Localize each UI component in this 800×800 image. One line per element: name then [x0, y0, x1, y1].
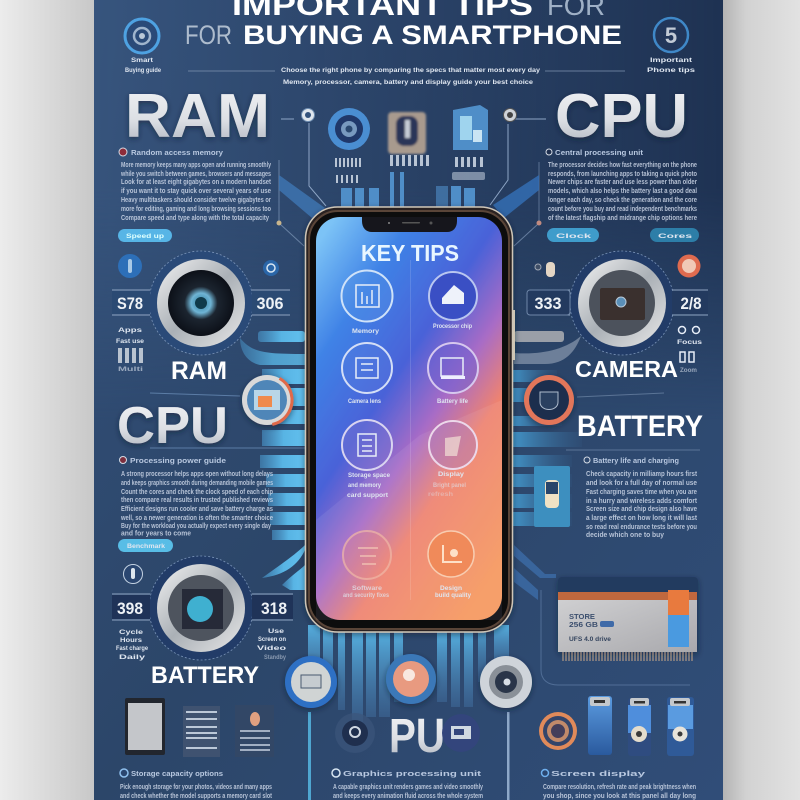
- right camera module: 333: [534, 294, 562, 313]
- mini stats battery left: Cycle: [119, 630, 144, 636]
- text block: RAM: More memory keeps many apps open and running smoothly: [121, 162, 271, 169]
- text block: CPU left: Buy for the workload you actually expect every single day: [121, 523, 271, 530]
- text block: RAM: [119, 148, 272, 222]
- battery chip: 256 GB: [569, 622, 598, 629]
- heading: PU: PU: [389, 710, 445, 763]
- mini stats right: Focus: [677, 340, 703, 346]
- text block: CPU: [546, 148, 697, 222]
- tip icon 5: and memory: [348, 483, 382, 489]
- battery chip: UFS 4.0 drive: [569, 636, 611, 643]
- text block: CPU left: well, so a newer generation is often the smarter choice: [120, 515, 273, 522]
- text block: CPU left: Count the cores and check the clock speed of each chip: [121, 489, 273, 496]
- text block: battery: Check capacity in milliamp hours first: [586, 471, 698, 478]
- poster background: [94, 0, 723, 800]
- mini stats left: Apps: [118, 328, 143, 334]
- title: [185, 0, 622, 50]
- tip icon 4: [428, 343, 478, 405]
- text block: bottom left: [120, 769, 273, 800]
- chip outline path: [541, 590, 690, 685]
- text block: battery: in a hurry and wireless adds comfort: [586, 498, 698, 505]
- mini stats right: Zoom: [680, 368, 697, 374]
- mini stats left: [116, 328, 145, 373]
- icon: dark circle: [335, 713, 375, 753]
- icon: blue lens: [328, 108, 370, 150]
- icon: top left emblem: Smart: [131, 58, 153, 64]
- tip icon 8: Design: [440, 586, 462, 592]
- text block: CPU left: A strong processor helps apps open without long delays: [121, 471, 273, 478]
- tip icon 5: card support: [347, 493, 388, 499]
- icon: photo document: [235, 705, 274, 757]
- text block: battery: Fast charging saves time when you are: [586, 489, 697, 496]
- tip icon 8: build quality: [435, 593, 472, 599]
- text block: RAM: Random access memory: [131, 148, 224, 157]
- connector lines top: [279, 119, 546, 246]
- tip icon 2: [429, 272, 477, 330]
- pill: CPU left: [118, 539, 173, 552]
- mini stats battery left: [116, 630, 149, 661]
- icon: bottom circle lens: [480, 656, 532, 708]
- icon: small portrait: [535, 262, 555, 277]
- heading: RAM: RAM: [125, 82, 270, 151]
- subtitle: Memory, processor, camera, battery and display guide your best choice: [283, 80, 534, 86]
- mini stats battery right: Screen on: [258, 637, 286, 643]
- icon: navy circle: [442, 714, 480, 752]
- tip icon 4: Battery life: [437, 399, 469, 405]
- mini stats battery right: Video: [257, 646, 287, 652]
- icon: spiral dial: [539, 712, 577, 750]
- text block: RAM: while you switch between games, browsers and messages: [120, 171, 271, 178]
- pill: CPU right: [650, 228, 699, 242]
- subtitle: Choose the right phone by comparing the specs that matter most every day: [281, 68, 541, 74]
- tip icon 1: Memory: [352, 329, 380, 335]
- text block: bottom left: Storage capacity options: [131, 769, 223, 778]
- text block: bottom right: Compare resolution, refresh rate and peak brightness when: [543, 784, 696, 791]
- text block: CPU left: [120, 456, 273, 538]
- battery chip: STORE: [569, 614, 595, 621]
- text block: battery: decide which one to buy: [586, 532, 664, 539]
- mini stats battery right: Standby: [264, 655, 287, 661]
- text block: CPU: Central processing unit: [555, 148, 644, 157]
- text block: CPU left: and for years to come: [121, 530, 191, 538]
- icon: top right emblem: Phone tips: [647, 68, 696, 74]
- text block: bottom left: Pick enough storage for your photos, videos and many apps: [120, 784, 272, 791]
- text block: battery: Screen size and chip design also have: [586, 506, 697, 513]
- icon: top left emblem: Buying guide: [125, 68, 162, 74]
- left stripes: [240, 331, 305, 590]
- icon: device: [534, 466, 570, 527]
- tip icon 1: [342, 270, 392, 335]
- text block: battery: Battery life and charging: [593, 456, 679, 465]
- mini stats left: Multi: [118, 367, 144, 373]
- bottom vertical stripes: [308, 625, 509, 722]
- node icons: [276, 108, 542, 226]
- text block: RAM: Compare speed and type along with the total capacity: [121, 215, 269, 222]
- right camera module: [527, 251, 708, 355]
- icon: orange small: [678, 254, 700, 278]
- text block: CPU left: then compare real results in trusted published reviews: [121, 497, 273, 504]
- mini stats left: Fast use: [116, 339, 145, 345]
- icon: small outline: [124, 564, 142, 584]
- divider: [150, 393, 305, 448]
- icon: blue box: [453, 105, 488, 150]
- mini stats right: [677, 326, 703, 374]
- battery chip: [558, 577, 698, 661]
- label: CAMERA: CAMERA: [575, 356, 678, 382]
- tip icon 3: [342, 343, 392, 405]
- text block: battery: and look for a full day of normal use: [586, 480, 697, 487]
- right stripes: [512, 331, 582, 526]
- tip icon 7: [343, 531, 391, 599]
- pill: CPU left: Clock: [556, 234, 592, 240]
- heading: CPU: CPU: [555, 82, 688, 151]
- mini stats battery left: Daily: [119, 655, 146, 661]
- pill: RAM: [118, 229, 172, 242]
- battery camera module: [112, 556, 293, 660]
- text block: CPU: The processor decides how fast everything on the phone: [548, 162, 697, 169]
- icon: usb drive 3: [667, 697, 694, 756]
- icon: bottom circle memory: [285, 656, 337, 708]
- icon: top right emblem: Important: [650, 58, 692, 64]
- text block: RAM: Heavy multitaskers should consider twelve gigabytes or: [121, 197, 271, 204]
- decorative blue wedges: [279, 175, 539, 218]
- text block: bottom middle: Graphics processing unit: [343, 769, 482, 778]
- tip icon 6: refresh: [428, 492, 453, 498]
- pins and bars under icons: [335, 155, 485, 208]
- icon: tablet: [125, 698, 165, 755]
- tip icon 5: [342, 420, 392, 499]
- tip icon 8: [428, 531, 474, 599]
- text block: bottom middle: and keeps every animation fluid across the whole system: [333, 793, 483, 800]
- icon: orange badge left: [233, 366, 301, 434]
- vertical lines: [308, 712, 510, 800]
- icon: orange badge right: [524, 375, 574, 425]
- phone heading: KEY TIPS: KEY TIPS: [361, 240, 459, 266]
- mini stats battery left: Hours: [120, 638, 143, 644]
- divider right: [566, 393, 700, 450]
- right camera module: 2/8: [680, 294, 702, 313]
- title: BUYING A SMARTPHONE: [243, 20, 622, 50]
- pill: CPU left: [547, 228, 599, 242]
- mini stats battery right: Use: [268, 629, 285, 635]
- tip icon 3: Camera lens: [348, 399, 382, 405]
- pill: CPU left: Benchmark: [127, 544, 166, 550]
- icon: usb drive 1: [588, 696, 612, 755]
- left camera module: 306: [256, 294, 284, 313]
- left camera module: [112, 251, 290, 355]
- text block: CPU left: Processing power guide: [130, 456, 226, 465]
- tip icon 6: Display: [438, 472, 465, 478]
- text block: bottom right: Screen display: [551, 769, 646, 778]
- text block: battery: [584, 456, 698, 539]
- text block: RAM: more for editing, gaming and long browsing sessions too: [121, 206, 271, 213]
- label: BATTERY right: BATTERY: [577, 410, 703, 443]
- heading: CPU left: CPU: [117, 397, 228, 455]
- text block: bottom middle: [332, 769, 483, 800]
- icon: small blue left: [118, 254, 142, 278]
- battery camera module: 398: [117, 599, 143, 618]
- tip icon 5: Storage space: [348, 473, 391, 479]
- label: BATTERY left: BATTERY: [151, 662, 259, 689]
- text block: RAM: if you want it to stay quick over several years of use: [121, 188, 271, 195]
- tip icon 6: [428, 421, 477, 498]
- tip icon 2: Processor chip: [433, 324, 472, 330]
- battery camera module: 318: [261, 599, 287, 618]
- text block: CPU: responds, from launching apps to taking a quick photo: [548, 171, 697, 178]
- text block: CPU: count before you buy and read independent benchmarks: [548, 206, 697, 213]
- text block: CPU: of the latest flagship and midrange chip options here: [548, 215, 697, 222]
- text block: CPU: longer each day, so check the generation and the core: [548, 197, 697, 204]
- tip icon 7: and security fixes: [343, 593, 390, 599]
- text block: battery: so read real endurance tests before you: [586, 524, 697, 531]
- subtitle: [188, 68, 625, 86]
- icon: top right emblem: [647, 18, 696, 74]
- text block: RAM: Look for at least eight gigabytes on a modern handset: [121, 179, 272, 186]
- text block: bottom left: and check whether the model supports a memory card slot: [120, 793, 273, 800]
- text block: bottom middle: A capable graphics unit renders games and video smoothly: [333, 784, 483, 791]
- tip icon 6: Bright panel: [433, 483, 466, 489]
- icon: small blue right: [263, 260, 279, 276]
- text block: CPU: models, which also helps the battery last a good deal: [548, 188, 697, 195]
- text block: CPU left: Efficient designs run cooler and save battery charge as: [121, 506, 273, 513]
- phone: [305, 207, 515, 632]
- icon: bottom circle orange: [386, 654, 436, 704]
- text block: CPU: Newer chips are faster and use less power than older: [548, 179, 697, 186]
- mini stats battery right: [257, 629, 287, 661]
- label: RAM: RAM: [171, 357, 227, 385]
- text block: bottom right: you shop, since you look at this panel all day long: [543, 793, 696, 800]
- icon: usb drive 2: [628, 698, 651, 756]
- icon: top left emblem: [125, 19, 162, 74]
- left camera module: S78: [117, 294, 143, 313]
- text block: CPU left: and keeps graphics smooth during demanding mobile games: [121, 480, 273, 487]
- text block: battery: a large effect on how long it will last: [586, 515, 698, 522]
- diagonal connector right of phone: [514, 545, 556, 600]
- icon: top right emblem: 5: [665, 23, 677, 48]
- icon: list document: [183, 706, 220, 757]
- icon: chip centre: [388, 112, 426, 154]
- pill: RAM: Speed up: [126, 234, 164, 240]
- tip icon 7: Software: [352, 586, 383, 592]
- pill: CPU right: Cores: [658, 234, 693, 240]
- mini stats battery left: Fast charge: [116, 646, 149, 652]
- text block: bottom right: [542, 769, 696, 800]
- title: FOR: [185, 20, 232, 50]
